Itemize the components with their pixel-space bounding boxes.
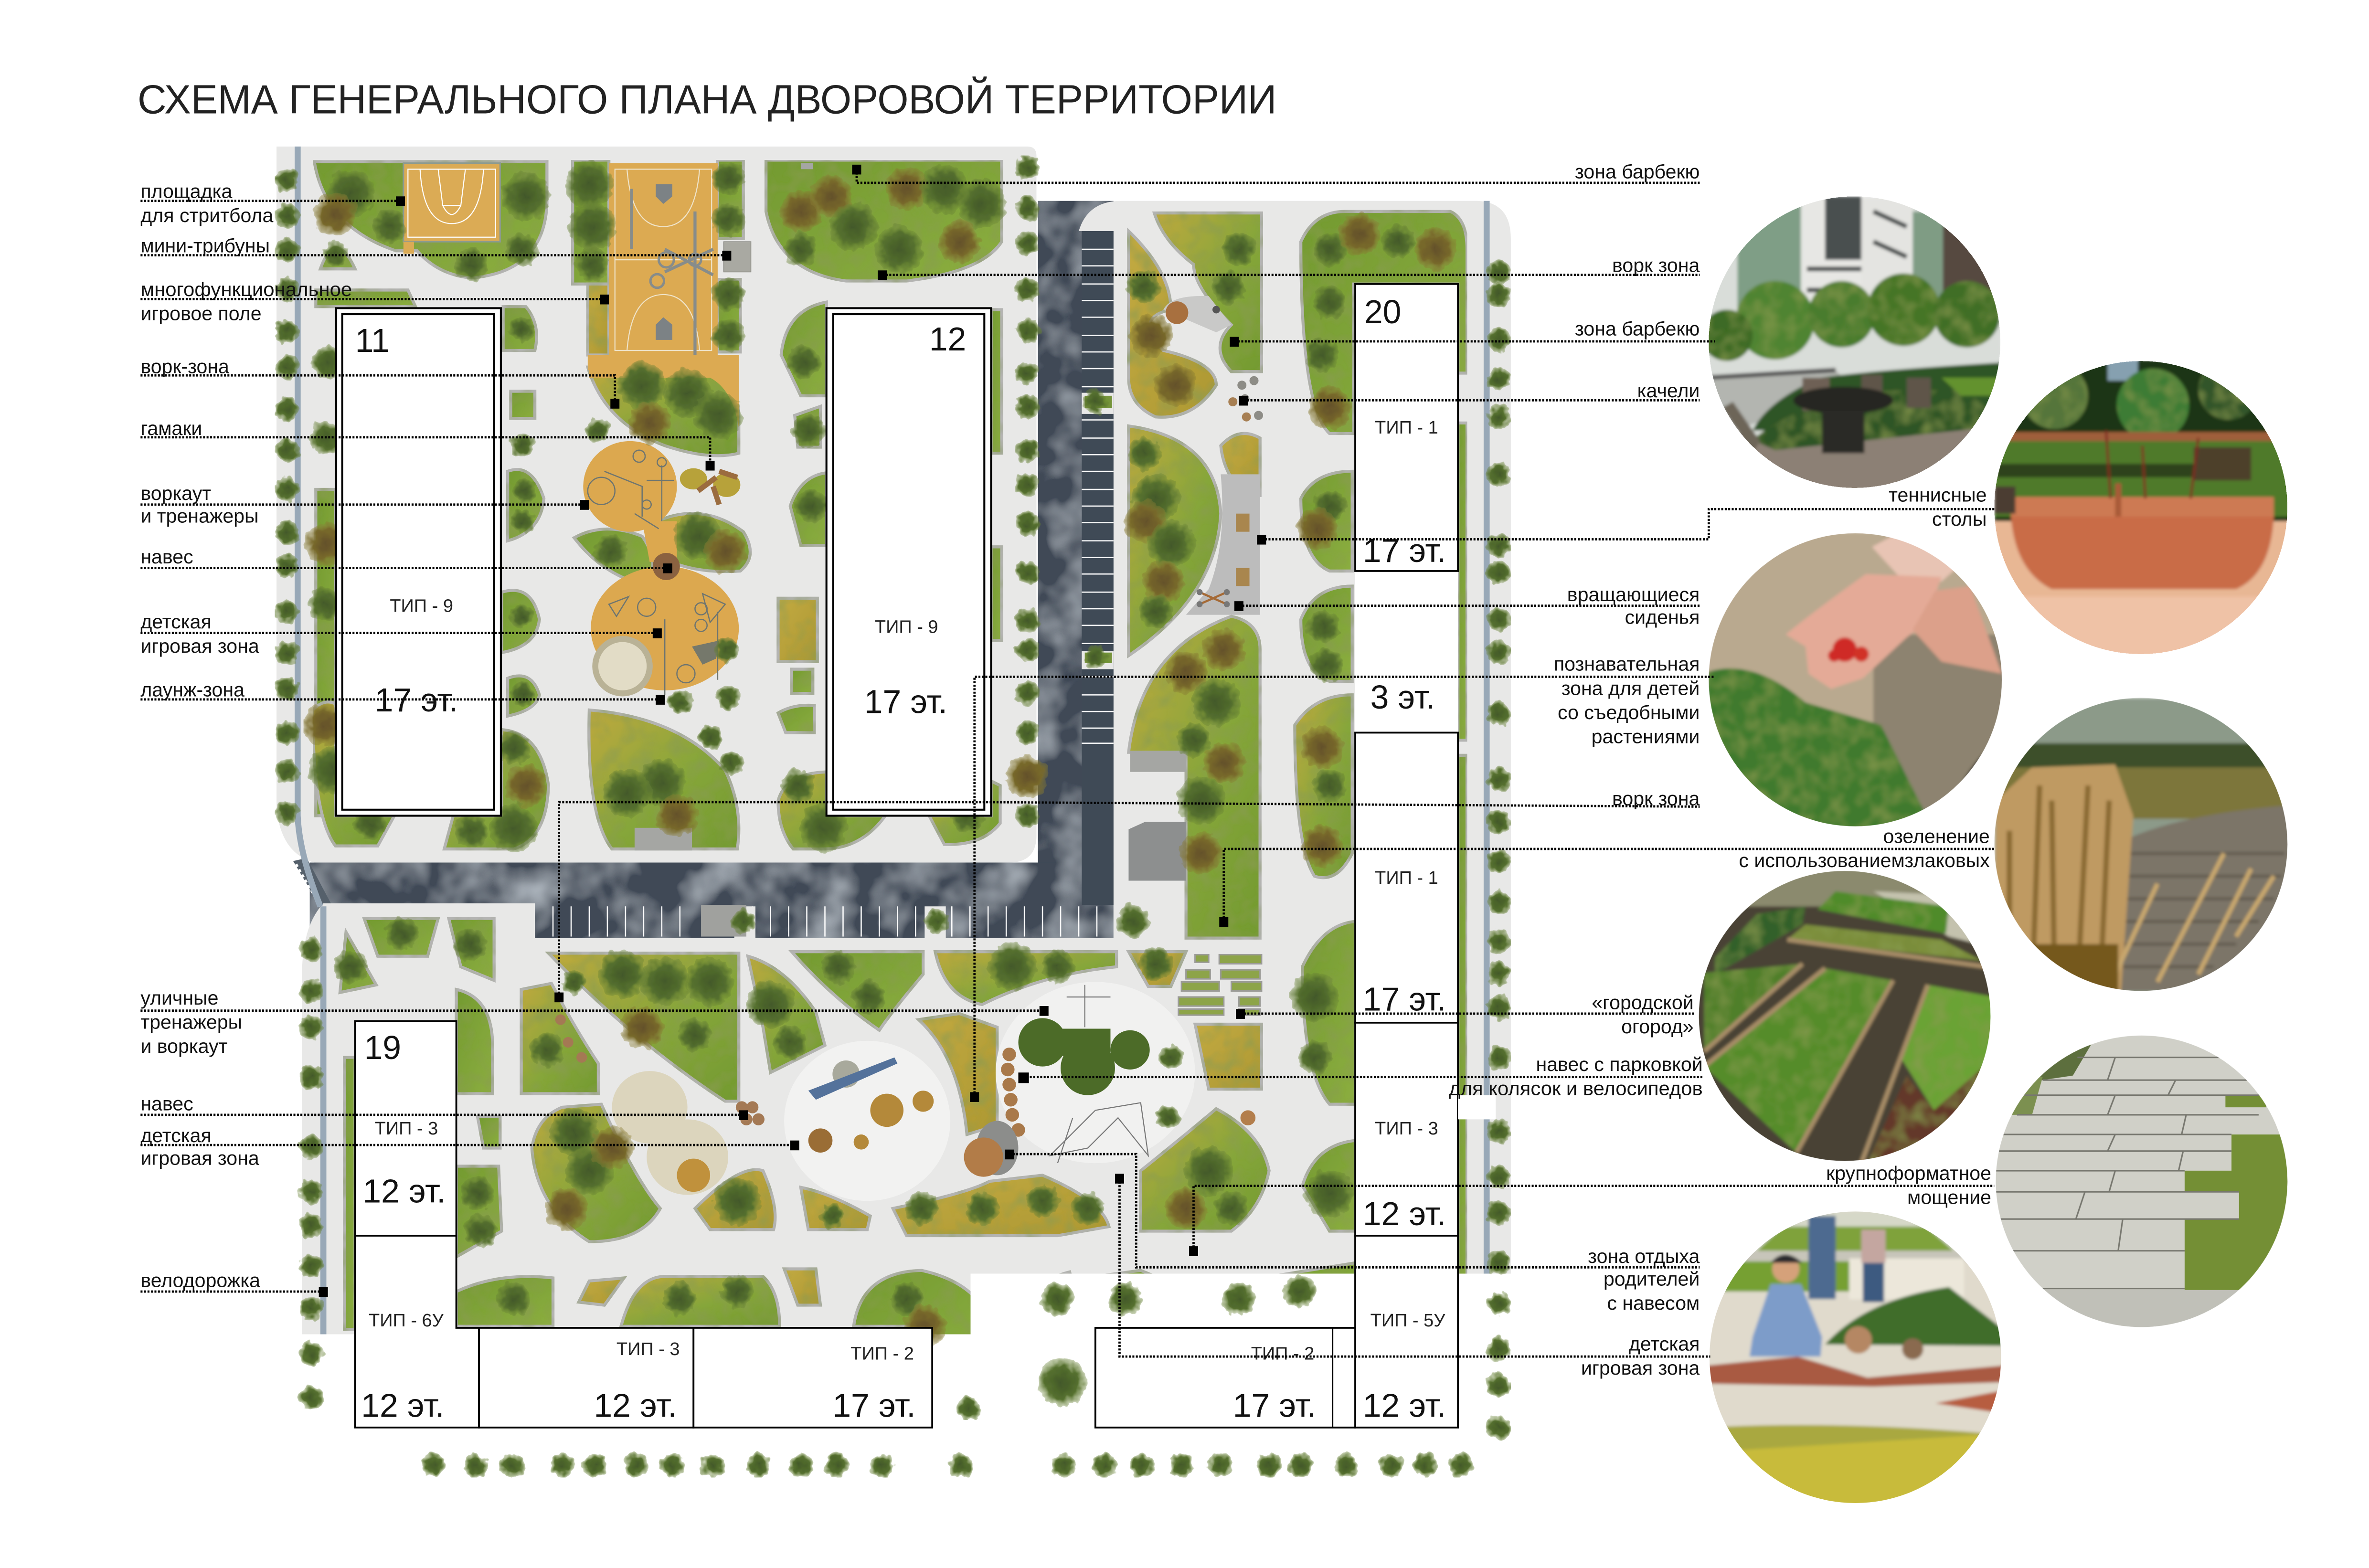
callout: мини-трибуны: мини-трибуны (140, 234, 270, 256)
callout: зона отдыха родителей с навесом: с навесом (1607, 1292, 1700, 1314)
trees in the courtyards (304, 160, 1456, 1420)
building 20: ТИП - 1 (1375, 418, 1438, 438)
callout: уличные тренажеры и воркаут: и воркаут (140, 1035, 228, 1057)
callout: многофункциональное игровое поле: игровое поле (140, 303, 262, 325)
building 11: ТИП - 9 (390, 596, 453, 616)
callout: велодорожка: велодорожка (140, 1270, 260, 1292)
building south-east wing: 17 эт. (1233, 1387, 1316, 1424)
photo: table tennis table (1994, 360, 2290, 665)
master plan (275, 147, 1511, 1479)
building 20: 12 эт. (1363, 1387, 1446, 1424)
streetball court (404, 163, 500, 254)
building 20: 17 эт. (1363, 981, 1446, 1018)
callout: ворк зона (554, 787, 1700, 1002)
building 19: ТИП - 6У (369, 1311, 444, 1331)
building 11: 11 (355, 322, 390, 359)
callout: городской огород (1236, 991, 1695, 1038)
callout: детская игровая зона (140, 611, 662, 657)
callout: навес с парковкой для колясок и велосипедов: для колясок и велосипедов (1449, 1078, 1703, 1100)
photo: large-format paving (1994, 1035, 2290, 1332)
title: СХЕМА ГЕНЕРАЛЬНОГО ПЛАНА ДВОРОВОЙ ТЕРРИТОРИИ (138, 76, 1276, 122)
callout: воркаут и тренажеры (140, 482, 589, 527)
callout: городской огород: «городской (1592, 991, 1694, 1013)
callout: вращающиеся сиденья (1234, 583, 1700, 628)
callout: ворк-зона: ворк-зона (140, 355, 229, 377)
photo: edible plants zone (1707, 532, 2009, 831)
building 12 (827, 308, 991, 816)
building 19: 12 эт. (362, 1172, 446, 1209)
callout: крупноформатное мощение (1189, 1162, 1994, 1256)
photo: children's play zone (1707, 1208, 2007, 1511)
building 19: ТИП - 2 (850, 1344, 914, 1364)
callout: площадка для стритбола: для стритбола (140, 204, 274, 226)
callout: детская игровая зона: игровая зона (1581, 1357, 1700, 1379)
callout: уличные тренажеры и воркаут: уличные (140, 987, 218, 1009)
callout: многофункциональное игровое поле: многофункциональное (140, 278, 352, 300)
callout: детская игровая зона: игровая зона (140, 635, 259, 657)
callout: познавательная зона для детей (970, 653, 1715, 1102)
building 11: 17 эт. (375, 681, 458, 719)
urban vegetable beds (1179, 955, 1262, 1015)
callout: познавательная зона для детей: зона для детей (1562, 677, 1700, 699)
callout: озеленение с использованием злаковых (1219, 825, 1994, 927)
road and parking (293, 201, 1114, 938)
callout: качели: качели (1637, 380, 1700, 402)
photo: barbecue zone (1701, 196, 2003, 491)
callout: площадка для стритбола (140, 180, 405, 226)
callout: зона барбекю (1230, 318, 1715, 347)
building 20: ТИП - 3 (1375, 1119, 1438, 1139)
building 19: ТИП - 3 (616, 1339, 680, 1359)
callout: вращающиеся сиденья: вращающиеся (1567, 583, 1700, 605)
callout: мини-трибуны (140, 234, 731, 261)
callout: зона барбекю (852, 160, 1700, 183)
callout: уличные тренажеры и воркаут (140, 987, 1049, 1057)
callout: детская игровая зона (140, 1124, 799, 1169)
building 20: 17 эт. (1363, 532, 1446, 569)
callout: навес (140, 1092, 748, 1120)
callout: зона барбекю: зона барбекю (1575, 160, 1700, 182)
callout: городской огород: огород» (1621, 1016, 1694, 1038)
central playgrounds (555, 982, 1255, 1201)
building 19: 12 эт. (594, 1387, 677, 1424)
building 19 (355, 1021, 932, 1428)
white patch behind label (1458, 1095, 1496, 1119)
callout: лаунж-зона (140, 679, 665, 705)
building 19: 19 (364, 1029, 401, 1066)
building 20: ТИП - 5У (1370, 1311, 1445, 1331)
callout: навес (140, 546, 672, 573)
bicycle path (297, 147, 1487, 1455)
callout: гамаки (140, 417, 715, 471)
tennis plaza (1186, 474, 1260, 615)
building 20: 20 (1364, 293, 1401, 330)
multifunctional game field (588, 163, 751, 427)
callout: воркаут и тренажеры: и тренажеры (140, 505, 259, 527)
callout: навес с парковкой для колясок и велосипедов: навес с парковкой (1536, 1053, 1703, 1075)
callout: велодорожка (140, 1270, 328, 1297)
callout: крупноформатное мощение: крупноформатное (1826, 1162, 1991, 1184)
callout: площадка для стритбола: площадка (140, 180, 232, 202)
callout: уличные тренажеры и воркаут: тренажеры (140, 1011, 242, 1033)
photo: ornamental grasses (1994, 698, 2290, 994)
small shelter blocks (635, 163, 1186, 937)
building 12: 12 (929, 320, 966, 358)
callout: ворк зона: ворк зона (1612, 254, 1700, 276)
callout: теннисные столы: теннисные (1889, 484, 1987, 506)
perimeter tree rows (275, 156, 1511, 1477)
callout: зона отдыха родителей с навесом: родителей (1604, 1268, 1700, 1290)
paved ground (276, 147, 1511, 1479)
callout: теннисные столы (1257, 484, 1994, 545)
hammocks (680, 468, 740, 505)
callout: гамаки: гамаки (140, 417, 202, 439)
parking tree islands (734, 393, 1114, 938)
callout: навес: навес (140, 1092, 193, 1114)
callout: познавательная зона для детей: растениями (1592, 726, 1700, 748)
building 20: ТИП - 1 (1375, 868, 1438, 888)
callout: детская игровая зона: детская (140, 611, 212, 633)
barbecue pavilion and swings (1163, 296, 1263, 422)
building 11 (336, 308, 501, 816)
building 20: 3 эт. (1370, 678, 1435, 716)
building south-east wing (1095, 1328, 1355, 1428)
callout: детская игровая зона: детская (140, 1124, 212, 1146)
callout: познавательная зона для детей: познавательная (1554, 653, 1700, 675)
children playground (591, 553, 739, 697)
building 19: 12 эт. (361, 1387, 444, 1424)
building 20 (1355, 284, 1458, 1428)
callout: ворк-зона (140, 355, 619, 409)
callout: познавательная зона для детей: со съедобными (1558, 701, 1700, 723)
building 12: 17 эт. (864, 683, 947, 720)
callout: теннисные столы: столы (1932, 508, 1987, 530)
callout: навес: навес (140, 546, 193, 568)
building 19: ТИП - 3 (375, 1119, 438, 1139)
callout: качели (1239, 380, 1700, 405)
callout: озеленение с использованием злаковых: с использованиемзлаковых (1739, 849, 1990, 871)
callout: ворк зона (878, 254, 1700, 280)
callout: вращающиеся сиденья: сиденья (1625, 606, 1700, 628)
callout: многофункциональное игровое поле (140, 278, 609, 325)
callout: зона отдыха родителей с навесом (1005, 1150, 1700, 1314)
building 12: ТИП - 9 (875, 617, 938, 637)
callout: лаунж-зона: лаунж-зона (140, 679, 244, 701)
parking bays (553, 249, 1114, 937)
callout: детская игровая зона: игровая зона (140, 1147, 259, 1169)
photo: urban vegetable garden (1695, 869, 1994, 1166)
callout: зона барбекю: зона барбекю (1575, 318, 1700, 339)
callout: детская игровая зона (1115, 1174, 1710, 1379)
callout: зона отдыха родителей с навесом: зона отдыха (1588, 1245, 1700, 1267)
callout: воркаут и тренажеры: воркаут (140, 482, 211, 504)
building 20: 12 эт. (1363, 1195, 1446, 1232)
callout: навес с парковкой для колясок и велосипедов (1018, 1053, 1703, 1100)
lawns (313, 160, 1467, 1432)
building south-east wing: ТИП - 2 (1251, 1344, 1314, 1364)
building 19: 17 эт. (832, 1387, 916, 1424)
workout area (583, 441, 677, 562)
callout: озеленение с использованием злаковых: озеленение (1883, 825, 1990, 847)
callout: ворк зона: ворк зона (1612, 787, 1700, 809)
callout: крупноформатное мощение: мощение (1907, 1187, 1991, 1208)
callout: детская игровая зона: детская (1629, 1333, 1700, 1355)
